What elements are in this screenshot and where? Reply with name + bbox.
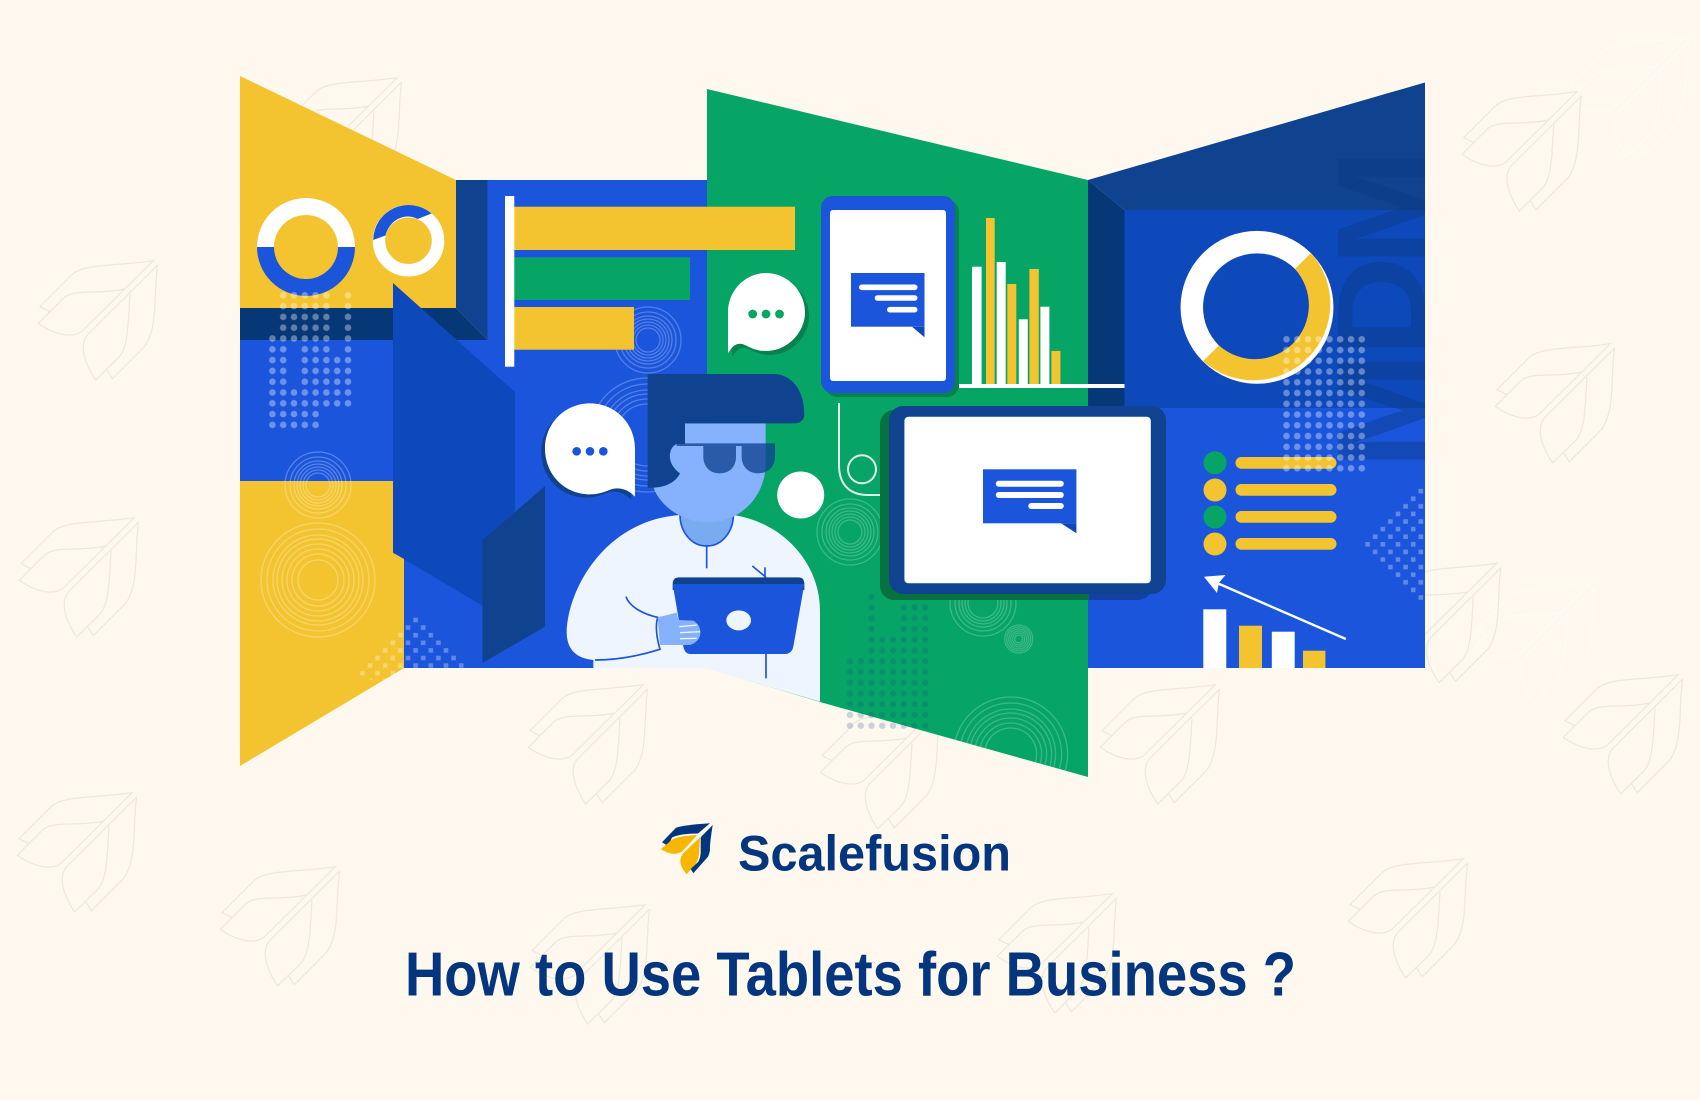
panel: right blue wall xyxy=(1088,82,1425,668)
hand xyxy=(658,613,700,645)
pale white leaf watermarks xyxy=(1475,38,1689,703)
tablet: landscape with message xyxy=(880,406,1166,600)
logo: Scalefusion mark xyxy=(661,823,713,874)
shirt xyxy=(567,515,820,702)
panel: left yellow and blue wall xyxy=(240,76,707,766)
hair xyxy=(648,374,804,488)
dot grid: right xyxy=(1281,334,1367,474)
watermark text: MDM: MDM xyxy=(1311,149,1452,469)
square dot diamond: lower left xyxy=(358,612,472,688)
logo wordmark: Scalefusion xyxy=(738,826,1011,882)
bar chart: green panel xyxy=(959,218,1124,388)
panel: green wall xyxy=(707,89,1088,777)
donut: small white and blue xyxy=(373,205,438,270)
concentric rings: blue panel xyxy=(590,307,704,492)
list: colored bullets and bars xyxy=(1204,451,1336,556)
donut: right white and yellow xyxy=(1192,242,1330,380)
message icon xyxy=(983,469,1076,533)
square dot diamond: right xyxy=(1363,482,1425,606)
sunglasses xyxy=(677,443,775,473)
tablet: portrait with message xyxy=(821,196,959,397)
donut: half white half blue xyxy=(257,198,355,296)
bar chart: lower right xyxy=(1203,609,1325,668)
arrow xyxy=(1204,575,1346,639)
speech bubble: green xyxy=(728,273,809,357)
character: person with sunglasses holding tablet xyxy=(567,374,820,702)
white circle xyxy=(777,472,824,518)
concentric rings: green panel xyxy=(816,498,1068,770)
connector line and small circle xyxy=(839,403,881,495)
title: How to Use Tablets for Business ? xyxy=(405,941,1296,1010)
horizontal bar chart xyxy=(505,196,795,367)
shirt lines xyxy=(595,546,766,678)
neck xyxy=(680,515,733,546)
dot grid: green panel xyxy=(845,591,931,731)
speech bubble: white with blue dots xyxy=(541,403,635,500)
handheld tablet xyxy=(673,577,804,654)
dot grid: left xyxy=(267,290,353,430)
message icon xyxy=(851,273,924,337)
head xyxy=(652,423,766,522)
concentric rings: left xyxy=(261,452,375,637)
